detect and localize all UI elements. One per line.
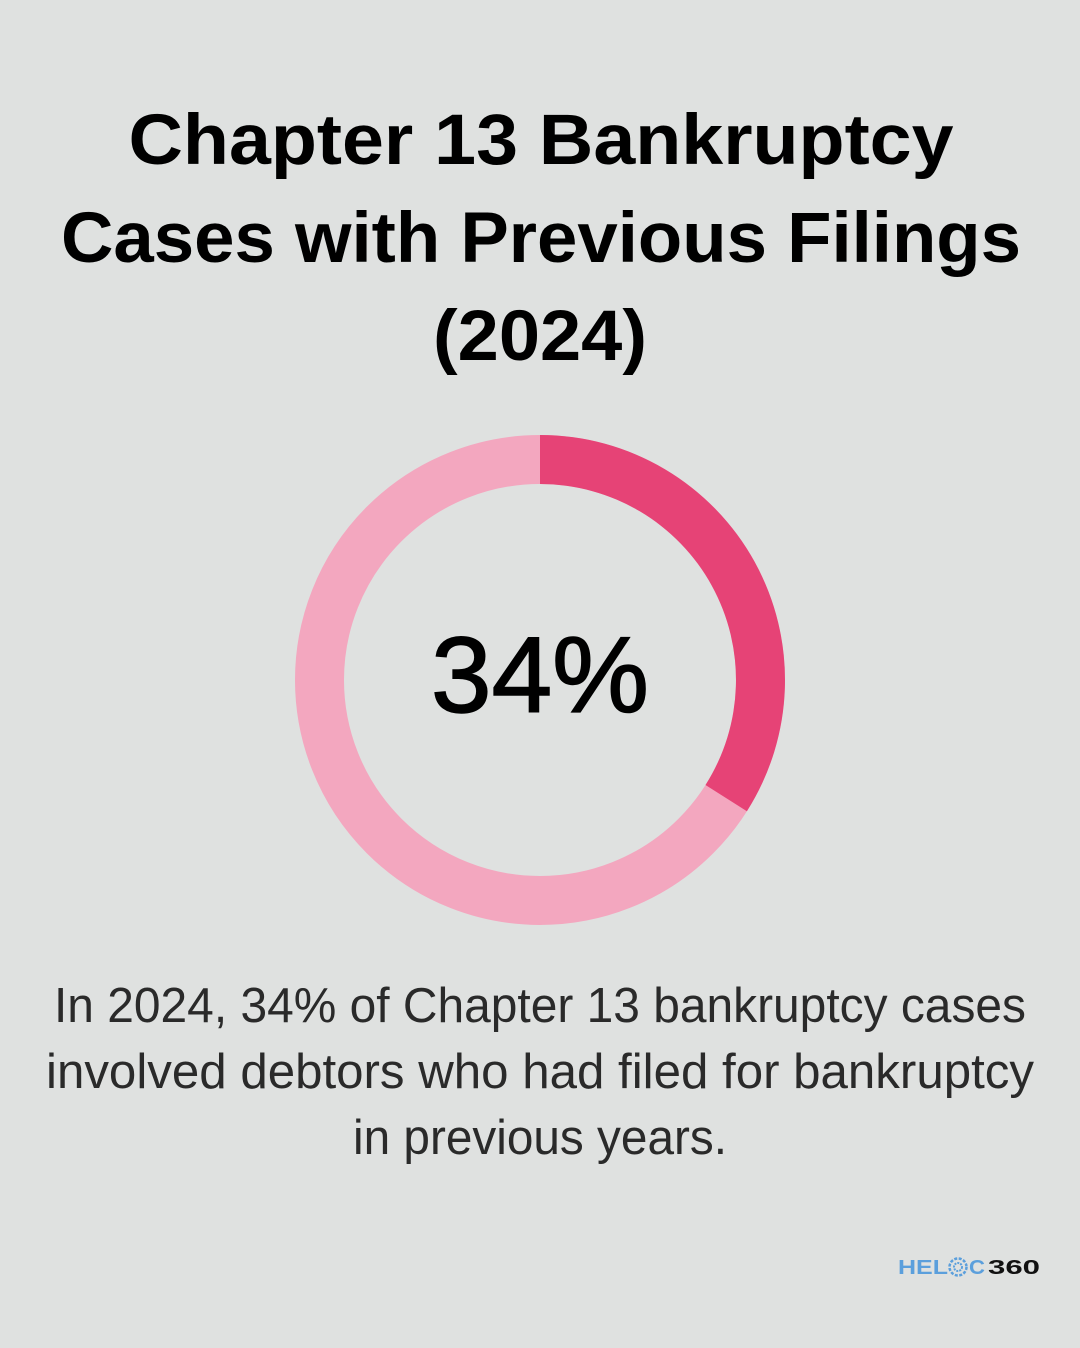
logo: HELOC360: 360 <box>988 1257 1040 1279</box>
logo: HELOC360 <box>898 1257 1040 1279</box>
description: In 2024, 34% of Chapter 13 bankruptcy cases <box>54 979 1026 1033</box>
center value: 34% <box>431 614 649 735</box>
icon: logo swirl <box>950 1258 966 1276</box>
logo: HELOC360: C <box>969 1257 985 1279</box>
title: (2024) <box>433 297 647 376</box>
title: Cases with Previous Filings <box>61 199 1021 278</box>
logo: HELOC360: HEL <box>898 1257 948 1279</box>
title <box>61 101 1021 376</box>
description <box>46 979 1034 1165</box>
title: Chapter 13 Bankruptcy <box>128 101 954 180</box>
description: involved debtors who had filed for bankruptcy <box>46 1045 1034 1099</box>
description: in previous years. <box>353 1111 727 1165</box>
donut chart: 34% <box>320 435 785 900</box>
